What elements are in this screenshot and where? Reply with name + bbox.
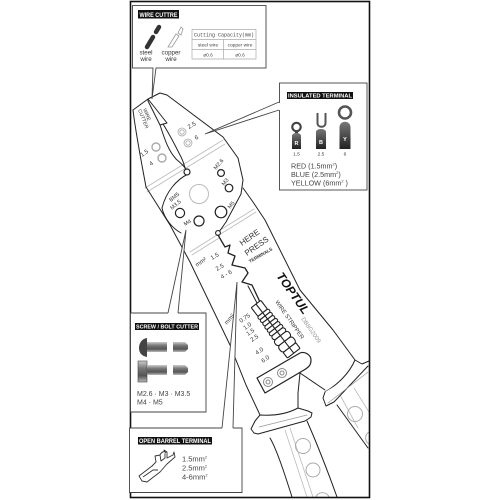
plier markings: M3.5: [169, 199, 183, 212]
panel: wire cutter: [132, 6, 266, 99]
heading: WIRE CUTTRE: [140, 12, 178, 19]
plier markings: 2.5: [187, 121, 198, 131]
icon: red ring terminal: [292, 123, 301, 158]
stripper pad: [257, 352, 311, 393]
plier markings: [136, 108, 322, 365]
crimp holes: [175, 170, 233, 226]
terminal sizes: 2: [333, 162, 336, 166]
plier markings: M4: [183, 219, 193, 228]
table: cutting capacity: steel wire: [198, 42, 218, 48]
plier markings: 4 - 6: [220, 269, 234, 281]
icon: yellow ring terminal: Y: [343, 137, 347, 143]
plier markings: DB8G2009: [299, 317, 322, 345]
plier markings: mm²: [195, 257, 208, 269]
plier markings: 4.0: [255, 347, 266, 357]
terminal sizes: ): [335, 162, 337, 170]
wire labels: [139, 50, 180, 63]
plier markings: 1.5: [210, 252, 221, 262]
terminal sizes: ): [344, 178, 348, 188]
wire labels: wire: [139, 56, 152, 63]
jaw and body outline: [133, 93, 243, 232]
lower handle: [251, 408, 312, 434]
wire labels: wire: [164, 56, 177, 63]
plier markings: 6: [194, 135, 200, 142]
grey terminal dies: [152, 128, 192, 162]
icon: blue fork terminal: B: [319, 140, 323, 146]
panel: screw / bolt cutter: [130, 230, 206, 412]
terminal crimp zigzag: [218, 235, 260, 302]
plier markings: WIRE STRIPPER: [273, 300, 305, 341]
icon: button head screw: [139, 338, 188, 357]
terminal sizes: [291, 162, 348, 188]
terminal sizes: ): [338, 170, 341, 179]
plier markings: M5: [227, 201, 236, 210]
icon: blue fork terminal: [316, 113, 326, 158]
terminal sizes: 2: [205, 472, 208, 478]
table: cutting capacity: copper wire: [228, 42, 253, 48]
terminal sizes: 4-6mm: [182, 472, 205, 482]
terminal sizes: 1.5mm: [182, 454, 205, 464]
plier markings: 2.5: [250, 334, 261, 344]
cutting edge: [160, 124, 187, 172]
plier markings: 1.0: [243, 322, 254, 332]
screw sizes: M4 · M5: [137, 400, 163, 406]
terminal sizes: 2: [341, 178, 344, 184]
heading: INSULATED TERMINAL: [288, 94, 352, 100]
plier markings: BM5: [168, 192, 181, 204]
terminal sizes: RED (1.5mm: [291, 162, 333, 170]
icon: blue fork terminal: 2.5: [318, 152, 325, 158]
plier markings: 6.0: [261, 355, 272, 365]
plier markings: TERMINALS: [248, 246, 273, 264]
table: cutting capacity: ⌀0.6: [203, 52, 213, 58]
icon: red ring terminal: R: [295, 141, 299, 147]
grey guide lines: [145, 140, 369, 497]
terminal sizes: [182, 454, 208, 482]
plier illustration: [133, 93, 369, 497]
upper handle: [325, 360, 369, 392]
handle web: [298, 373, 325, 408]
center pivot: [190, 184, 208, 204]
plier markings: 0.75: [239, 313, 252, 325]
screw sizes: [137, 391, 190, 406]
wire stripper notches: [249, 299, 301, 359]
terminal sizes: BLUE (2.5mm: [291, 170, 336, 179]
icon: red ring terminal: 1.5: [293, 152, 300, 158]
icon: open barrel terminal: [139, 450, 175, 482]
table: cutting capacity: ⌀0.6: [235, 52, 245, 58]
panel: open barrel terminal: [130, 282, 242, 492]
wire labels: copper: [162, 50, 180, 56]
plier markings: CUTTER: [136, 109, 149, 130]
heading: SCREW / BOLT CUTTER: [136, 325, 198, 331]
terminal sizes: YELLOW (6mm: [291, 178, 341, 188]
cutter blade slot: [148, 99, 167, 125]
heading: OPEN BARREL TERMINAL: [139, 439, 211, 445]
plier markings: M3: [221, 178, 230, 187]
wire cutter mark: WIRE: [141, 108, 152, 122]
brand logo: TOPTUL: [274, 270, 312, 317]
plier markings: 1.5: [246, 328, 257, 338]
table: cutting capacity: Cutting Capacity(mm): [194, 32, 254, 38]
icon: copper wire: [168, 27, 183, 47]
terminal sizes: 2: [205, 454, 208, 460]
joint circles: [184, 169, 190, 175]
screw sizes: M2.6 · M3 · M3.5: [137, 391, 190, 398]
outer frame: [130, 2, 370, 498]
plier markings: 2.5: [215, 263, 226, 273]
plier markings: 1.5: [140, 149, 151, 159]
plier markings: M2.6: [213, 158, 225, 171]
terminal sizes: 2: [336, 170, 339, 175]
icon: yellow ring terminal: [339, 106, 351, 158]
pivot arc: [162, 174, 188, 233]
plier markings: HERE: [238, 228, 261, 248]
panel: insulated terminal: [205, 83, 367, 190]
plier markings: 4: [149, 160, 155, 168]
icon: socket head screw: [138, 361, 188, 382]
icon: yellow ring terminal: 6: [344, 152, 347, 158]
icon: steel wire: [147, 27, 159, 47]
terminal sizes: 2: [205, 464, 208, 468]
plier markings: PRESS: [243, 235, 270, 258]
table: cutting capacity: [192, 30, 256, 59]
terminal sizes: 2.5mm: [182, 464, 205, 472]
wire labels: steel: [139, 50, 153, 56]
plier markings: mm²: [224, 313, 236, 326]
